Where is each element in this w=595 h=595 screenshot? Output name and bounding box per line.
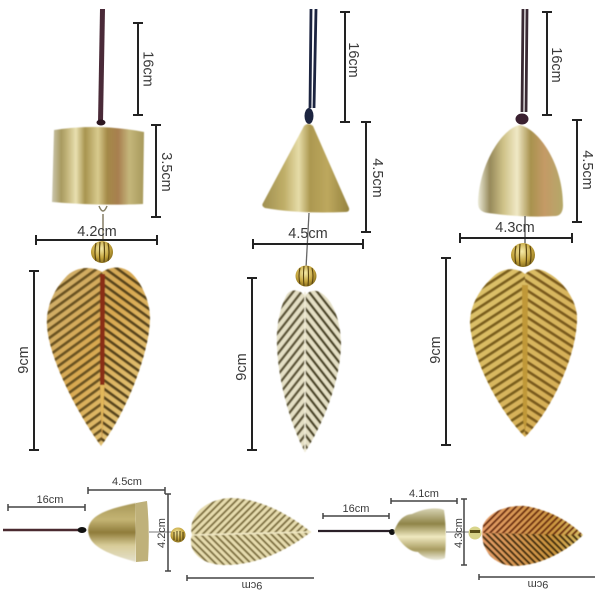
knot <box>96 120 106 126</box>
dimension: 4.3cm: 4.3cm <box>453 518 465 548</box>
dimension: 4.5cm <box>361 122 385 232</box>
knot <box>516 114 528 124</box>
bell body <box>52 127 144 205</box>
dimension: 3.5cm <box>151 125 174 217</box>
bead <box>296 266 316 286</box>
leaf <box>277 290 341 452</box>
hook wire <box>446 531 470 533</box>
dimension: 16cm <box>340 12 361 122</box>
chime: dome bell <box>428 9 595 445</box>
leaf <box>482 506 583 566</box>
dimension: 4.5cm: 4.5cm <box>112 476 142 488</box>
hook wire <box>524 216 526 244</box>
dimension: 9cm: 9cm <box>16 346 32 374</box>
chime: cone bell <box>234 9 385 452</box>
bead <box>511 243 535 267</box>
dimension: 4.3cm: 4.3cm <box>495 220 535 236</box>
dimension: 16cm: 16cm <box>140 51 156 87</box>
bead <box>91 241 113 263</box>
dimension: 9cm: 9cm <box>242 579 262 591</box>
dimension: 4.5cm width: 4.5cm <box>288 226 328 242</box>
hook wire <box>149 531 172 533</box>
dimension: 9cm <box>187 575 314 591</box>
cord <box>522 9 527 112</box>
knot <box>78 527 86 533</box>
cord <box>100 9 102 122</box>
dimension: 16cm: 16cm <box>37 494 63 506</box>
dimension: 9cm <box>479 574 595 590</box>
dimension: 16cm <box>8 494 85 511</box>
dimension: 4.3cm <box>460 220 572 243</box>
hook wire <box>99 206 107 244</box>
dimension: 16cm <box>542 12 564 115</box>
horizontal chime: bottom right <box>318 488 595 590</box>
leaf <box>191 498 311 565</box>
dimension: 4.1cm <box>391 488 457 504</box>
dimension: 16cm: 16cm <box>343 503 369 515</box>
dimension: 4.3cm <box>453 499 467 565</box>
bell body <box>394 508 446 560</box>
dimension: 3.5cm: 3.5cm <box>158 152 174 192</box>
dimension: 4.5cm: 4.5cm <box>579 150 595 190</box>
dimension: 16cm: 16cm <box>548 47 564 83</box>
dimension: 4.2cm <box>36 224 157 245</box>
bell body <box>478 125 563 217</box>
cord <box>3 529 80 531</box>
dimension: 4.2cm <box>156 494 171 571</box>
leaf <box>470 269 577 437</box>
dimension: 9cm: 9cm <box>528 578 548 590</box>
dimension: 4.5cm <box>88 476 165 494</box>
leaf <box>47 267 150 446</box>
dimension: 4.2cm: 4.2cm <box>77 224 117 240</box>
dimension: 4.5cm <box>572 120 595 222</box>
bell body <box>262 124 349 212</box>
bell body <box>88 503 136 562</box>
bead <box>468 526 482 540</box>
dimension: 9cm <box>234 278 257 450</box>
bell rim <box>136 501 149 562</box>
dimension: 9cm: 9cm <box>234 353 250 381</box>
chime: cylinder bell <box>16 9 174 450</box>
dimension: 16cm <box>323 503 389 519</box>
cord <box>318 530 390 532</box>
dimension: 9cm <box>16 271 39 450</box>
hook wire <box>306 213 309 268</box>
dimension: 9cm <box>428 258 451 445</box>
dimension: 9cm: 9cm <box>428 336 444 364</box>
bead <box>170 528 186 542</box>
dimension: 4.5cm width <box>253 226 363 249</box>
cord <box>310 9 316 108</box>
horizontal chime: bottom left <box>3 476 314 591</box>
dimension: 4.5cm: 4.5cm <box>369 158 385 198</box>
knot <box>389 529 395 535</box>
dimension: 16cm: 16cm <box>345 42 361 78</box>
dimension: 16cm <box>133 23 156 115</box>
dimension: 4.1cm: 4.1cm <box>409 488 439 500</box>
dimension: 4.2cm: 4.2cm <box>156 518 168 548</box>
knot <box>304 108 314 124</box>
